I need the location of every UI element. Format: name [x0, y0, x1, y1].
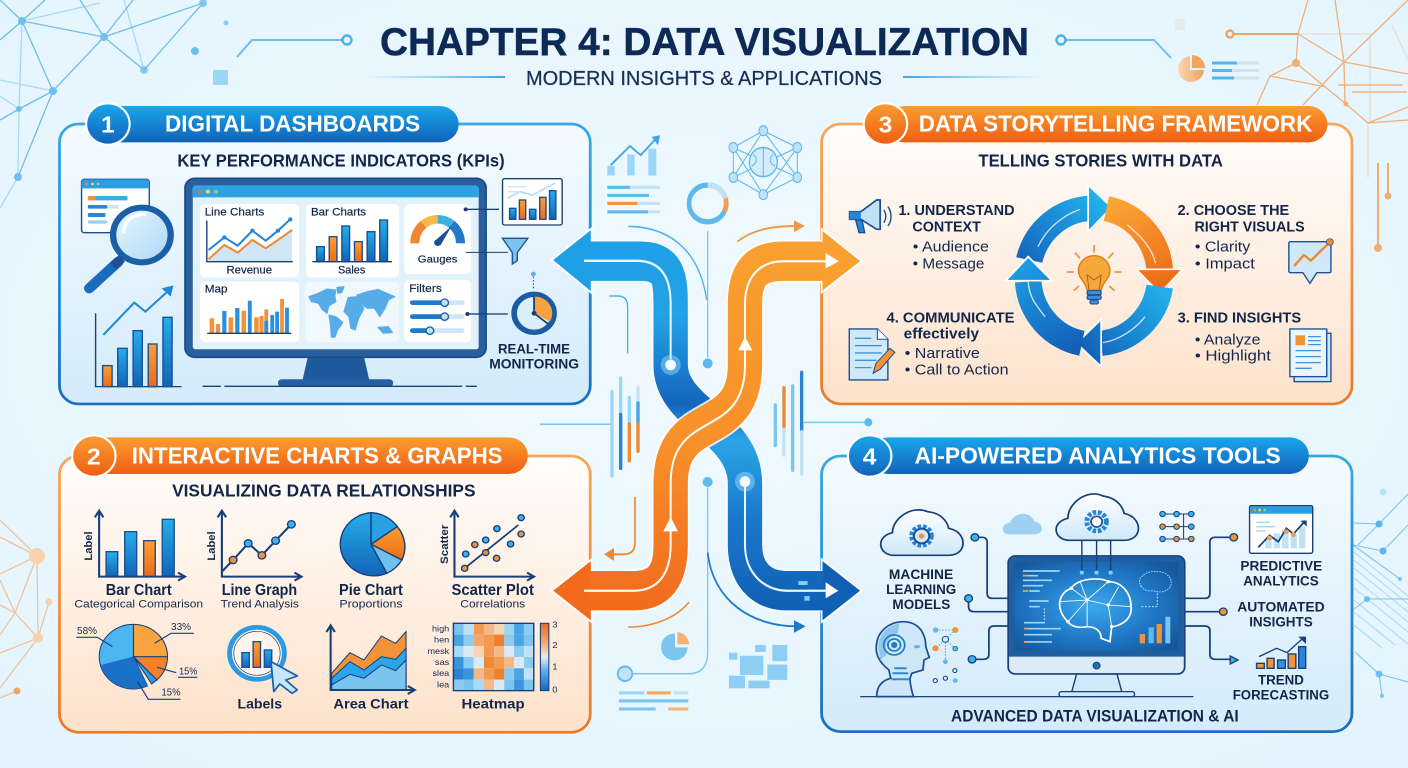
panel frame — [59, 456, 590, 732]
card: filters — [404, 280, 471, 342]
panel frame — [822, 456, 1352, 732]
panel subheading: TELLING STORIES WITH DATA — [978, 150, 1223, 171]
text: step 4: • Call to Action — [905, 363, 1009, 379]
hook line left — [609, 296, 628, 353]
chart: heatmap: slea — [433, 668, 449, 678]
connector: vertical from donut — [703, 231, 713, 368]
chart: labelled pie: 15% — [162, 688, 180, 699]
label: predictive analytics: PREDICTIVE — [1240, 559, 1323, 575]
panel frame — [59, 124, 590, 404]
subtitle rule left — [365, 76, 505, 78]
chart: growth bars with arrow — [96, 285, 182, 387]
curved line top — [628, 226, 707, 300]
icon: rising mini chart — [607, 135, 660, 213]
card: world map — [305, 282, 399, 342]
chart: line graph — [206, 511, 302, 610]
icon: neural brain network — [729, 126, 802, 200]
connector node orange — [1226, 30, 1298, 38]
icon: labels with cursor: Labels — [238, 697, 282, 712]
text: step 2: • Clarity — [1195, 240, 1251, 256]
signal bars right — [775, 373, 802, 474]
chart: labelled pie: 58% — [77, 626, 97, 637]
icon: cloud with gear (top) — [1056, 494, 1138, 540]
chart: heatmap: high — [432, 624, 449, 634]
chart: heatmap: sas — [435, 657, 450, 667]
chart: pie chart: Proportions — [339, 598, 403, 610]
title connector left — [237, 36, 352, 57]
curved orange arrow top — [737, 220, 805, 242]
chart: labelled pie: 33% — [171, 622, 191, 633]
corner network: top left — [0, 0, 228, 208]
chart: bar chart: Label — [83, 531, 95, 561]
panel subheading: KEY PERFORMANCE INDICATORS (KPIs) — [177, 150, 505, 171]
chart: area chart: Area Chart — [333, 697, 409, 712]
arrow: blue flow — [552, 228, 862, 622]
chart: bar chart: Bar Chart — [106, 582, 172, 599]
baseline under monitor — [203, 384, 477, 388]
card: map bars — [200, 282, 299, 342]
card: line charts: Revenue — [226, 265, 272, 276]
chart: labelled pie — [76, 622, 197, 699]
icon: AI robot head — [876, 622, 929, 697]
chart: pie chart — [339, 513, 405, 610]
label: real-time monitoring — [489, 342, 579, 372]
chart: heatmap: 3 — [552, 620, 557, 629]
chart: scatter plot: Correlations — [460, 598, 525, 610]
chart: heatmap — [427, 620, 557, 712]
card: gauges — [404, 204, 471, 274]
chart: scatter plot: Scatter — [439, 524, 451, 564]
title connector right — [1056, 36, 1171, 58]
icon: small pie — [661, 632, 689, 660]
cycle diagram — [1006, 185, 1183, 367]
icon: small cloud — [1003, 514, 1042, 534]
text: step 3 — [1178, 310, 1301, 365]
connector: filters to clock — [465, 312, 508, 316]
AI monitor — [860, 556, 1193, 697]
subtitle rule right — [903, 76, 1043, 78]
label: real-time monitoring: MONITORING — [489, 357, 579, 372]
label: machine learning models: MACHINE — [889, 567, 954, 583]
icon: document with pencil — [849, 329, 895, 380]
label: machine learning models: LEARNING — [886, 582, 956, 598]
icon: tile blocks — [729, 645, 787, 688]
icon: trend bars — [1257, 637, 1306, 668]
header ribbon — [864, 103, 1327, 145]
label: trend forecasting: TREND — [1258, 673, 1304, 689]
label: trend forecasting — [1233, 673, 1329, 703]
chart: bar chart: Categorical Comparison — [74, 598, 203, 610]
header ribbon: DATA STORYTELLING FRAMEWORK — [919, 111, 1313, 138]
icon: small neural nodes — [932, 627, 958, 683]
icon: mini chart — [503, 179, 562, 225]
text: step 3: • Highlight — [1195, 349, 1271, 365]
curved orange line bottom — [628, 602, 689, 627]
chart: area chart — [326, 625, 415, 712]
card: gauges: Gauges — [418, 254, 457, 266]
label: automated insights — [1237, 600, 1325, 631]
chart: bar chart — [74, 511, 203, 610]
orange hook arrow — [604, 497, 635, 561]
chart: line graph: Trend Analysis — [221, 598, 299, 610]
label: automated insights: INSIGHTS — [1249, 615, 1313, 631]
icon: predictive window — [1250, 506, 1313, 553]
text: step 4: 4. COMMUNICATE — [886, 310, 1015, 327]
label: predictive analytics: ANALYTICS — [1243, 574, 1319, 589]
header ribbon: 1 — [101, 112, 115, 138]
data feeds from cloud — [1080, 540, 1113, 575]
text: step 1: 1. UNDERSTAND — [898, 202, 1015, 219]
connector nodes — [965, 534, 1238, 664]
text: step 1: • Audience — [913, 240, 989, 256]
icon: clock — [514, 272, 554, 333]
chart: pie chart: Pie Chart — [339, 582, 404, 599]
label: real-time monitoring: REAL-TIME — [498, 342, 570, 357]
card: map bars: Map — [205, 284, 228, 296]
text: step 2: 2. CHOOSE THE — [1178, 202, 1289, 219]
icon: node matrix — [1160, 511, 1194, 542]
chart: heatmap: Heatmap — [461, 697, 525, 712]
header ribbon: 2 — [87, 444, 101, 470]
card: line charts: Line Charts — [205, 207, 265, 219]
icon: faint square — [1175, 19, 1185, 30]
text: step 3: • Analyze — [1195, 333, 1260, 348]
panel subheading: VISUALIZING DATA RELATIONSHIPS — [172, 480, 476, 501]
icon: mini pie and bars — [1178, 55, 1259, 82]
header ribbon: DIGITAL DASHBOARDS — [165, 111, 420, 138]
header ribbon: INTERACTIVE CHARTS & GRAPHS — [132, 443, 503, 469]
card: line charts — [200, 204, 299, 277]
label: trend forecasting: FORECASTING — [1233, 688, 1329, 703]
card: bar charts: Bar Charts — [311, 207, 366, 219]
panel 4: AI-powered analytics tools — [822, 435, 1352, 732]
central crossing flow — [540, 126, 872, 711]
text: step 2 — [1178, 202, 1305, 272]
header ribbon — [72, 435, 528, 477]
line from signal bars right — [803, 418, 872, 427]
icon: labels with cursor — [230, 627, 297, 712]
chart: heatmap: 1 — [552, 662, 557, 672]
text: step 3: 3. FIND INSIGHTS — [1178, 310, 1301, 327]
text: step 1 — [898, 202, 1015, 272]
text: step 4 — [886, 310, 1015, 379]
text rows bottom — [619, 691, 688, 711]
header ribbon: 3 — [879, 112, 892, 138]
chart: line graph: Label — [206, 531, 218, 561]
chart: scatter plot: Scatter Plot — [451, 582, 535, 599]
panel footer caption: ADVANCED DATA VISUALIZATION & AI — [951, 707, 1239, 726]
label: automated insights: AUTOMATED — [1237, 600, 1325, 616]
corner network: bottom left — [0, 520, 52, 698]
text: step 1: CONTEXT — [912, 219, 982, 236]
subtitle: MODERN INSIGHTS & APPLICATIONS — [526, 68, 882, 90]
signal bars left — [612, 378, 638, 476]
label: predictive analytics — [1240, 559, 1323, 589]
corner network: bottom right — [1353, 488, 1408, 698]
text: step 2: RIGHT VISUALS — [1194, 219, 1305, 236]
icon: cloud with gear (machine learning) — [881, 510, 963, 555]
card: bar charts: Sales — [338, 265, 366, 276]
chart: labelled pie: 15% — [179, 667, 197, 677]
panel 2: interactive charts and graphs — [59, 435, 590, 732]
label: machine learning models — [886, 567, 956, 613]
card: filters: Filters — [409, 283, 442, 295]
line to signal bars left — [540, 422, 611, 426]
icon: megaphone — [850, 200, 891, 233]
text: step 4: effectively — [904, 326, 980, 343]
chart: heatmap: 0 — [552, 685, 557, 694]
connector: gauges to chart — [464, 207, 499, 211]
icon: report pages — [1290, 329, 1331, 382]
label: machine learning models: MODELS — [892, 597, 951, 613]
icon: donut ring — [689, 185, 726, 222]
text: step 1: • Message — [913, 257, 984, 272]
curved blue arrow bottom — [708, 552, 806, 633]
connector: vertical bottom — [618, 477, 713, 681]
header ribbon: 4 — [863, 444, 877, 470]
chart: heatmap: mesk — [427, 646, 450, 656]
chart: scatter plot — [439, 511, 535, 610]
chart: line graph: Line Graph — [222, 582, 297, 599]
icon: funnel — [466, 238, 528, 264]
corner network: top right — [1257, 0, 1408, 178]
header ribbon: AI-POWERED ANALYTICS TOOLS — [915, 443, 1281, 469]
monitor — [185, 178, 486, 387]
card: bar charts — [306, 204, 399, 277]
side bars: right orange — [1374, 163, 1392, 252]
title: CHAPTER 4: DATA VISUALIZATION — [380, 21, 1029, 64]
panel 1: digital dashboards — [59, 103, 590, 404]
text: step 4: • Narrative — [905, 346, 980, 362]
chart: heatmap: hen — [434, 635, 449, 645]
arrow: orange flow — [552, 229, 862, 622]
icon: lightbulb — [1067, 245, 1122, 304]
connectors — [969, 537, 1230, 659]
panel 3: data storytelling framework — [822, 103, 1352, 404]
text: step 2: • Impact — [1195, 257, 1255, 272]
chart: heatmap: 2 — [552, 640, 557, 650]
header ribbon — [86, 103, 459, 145]
panel frame — [822, 124, 1352, 404]
icon: small square — [213, 70, 228, 85]
icon: chart bubble — [1289, 239, 1333, 283]
header ribbon — [848, 435, 1309, 477]
icon: browser window with magnifier — [82, 179, 171, 288]
chart: heatmap: lea — [437, 680, 449, 689]
